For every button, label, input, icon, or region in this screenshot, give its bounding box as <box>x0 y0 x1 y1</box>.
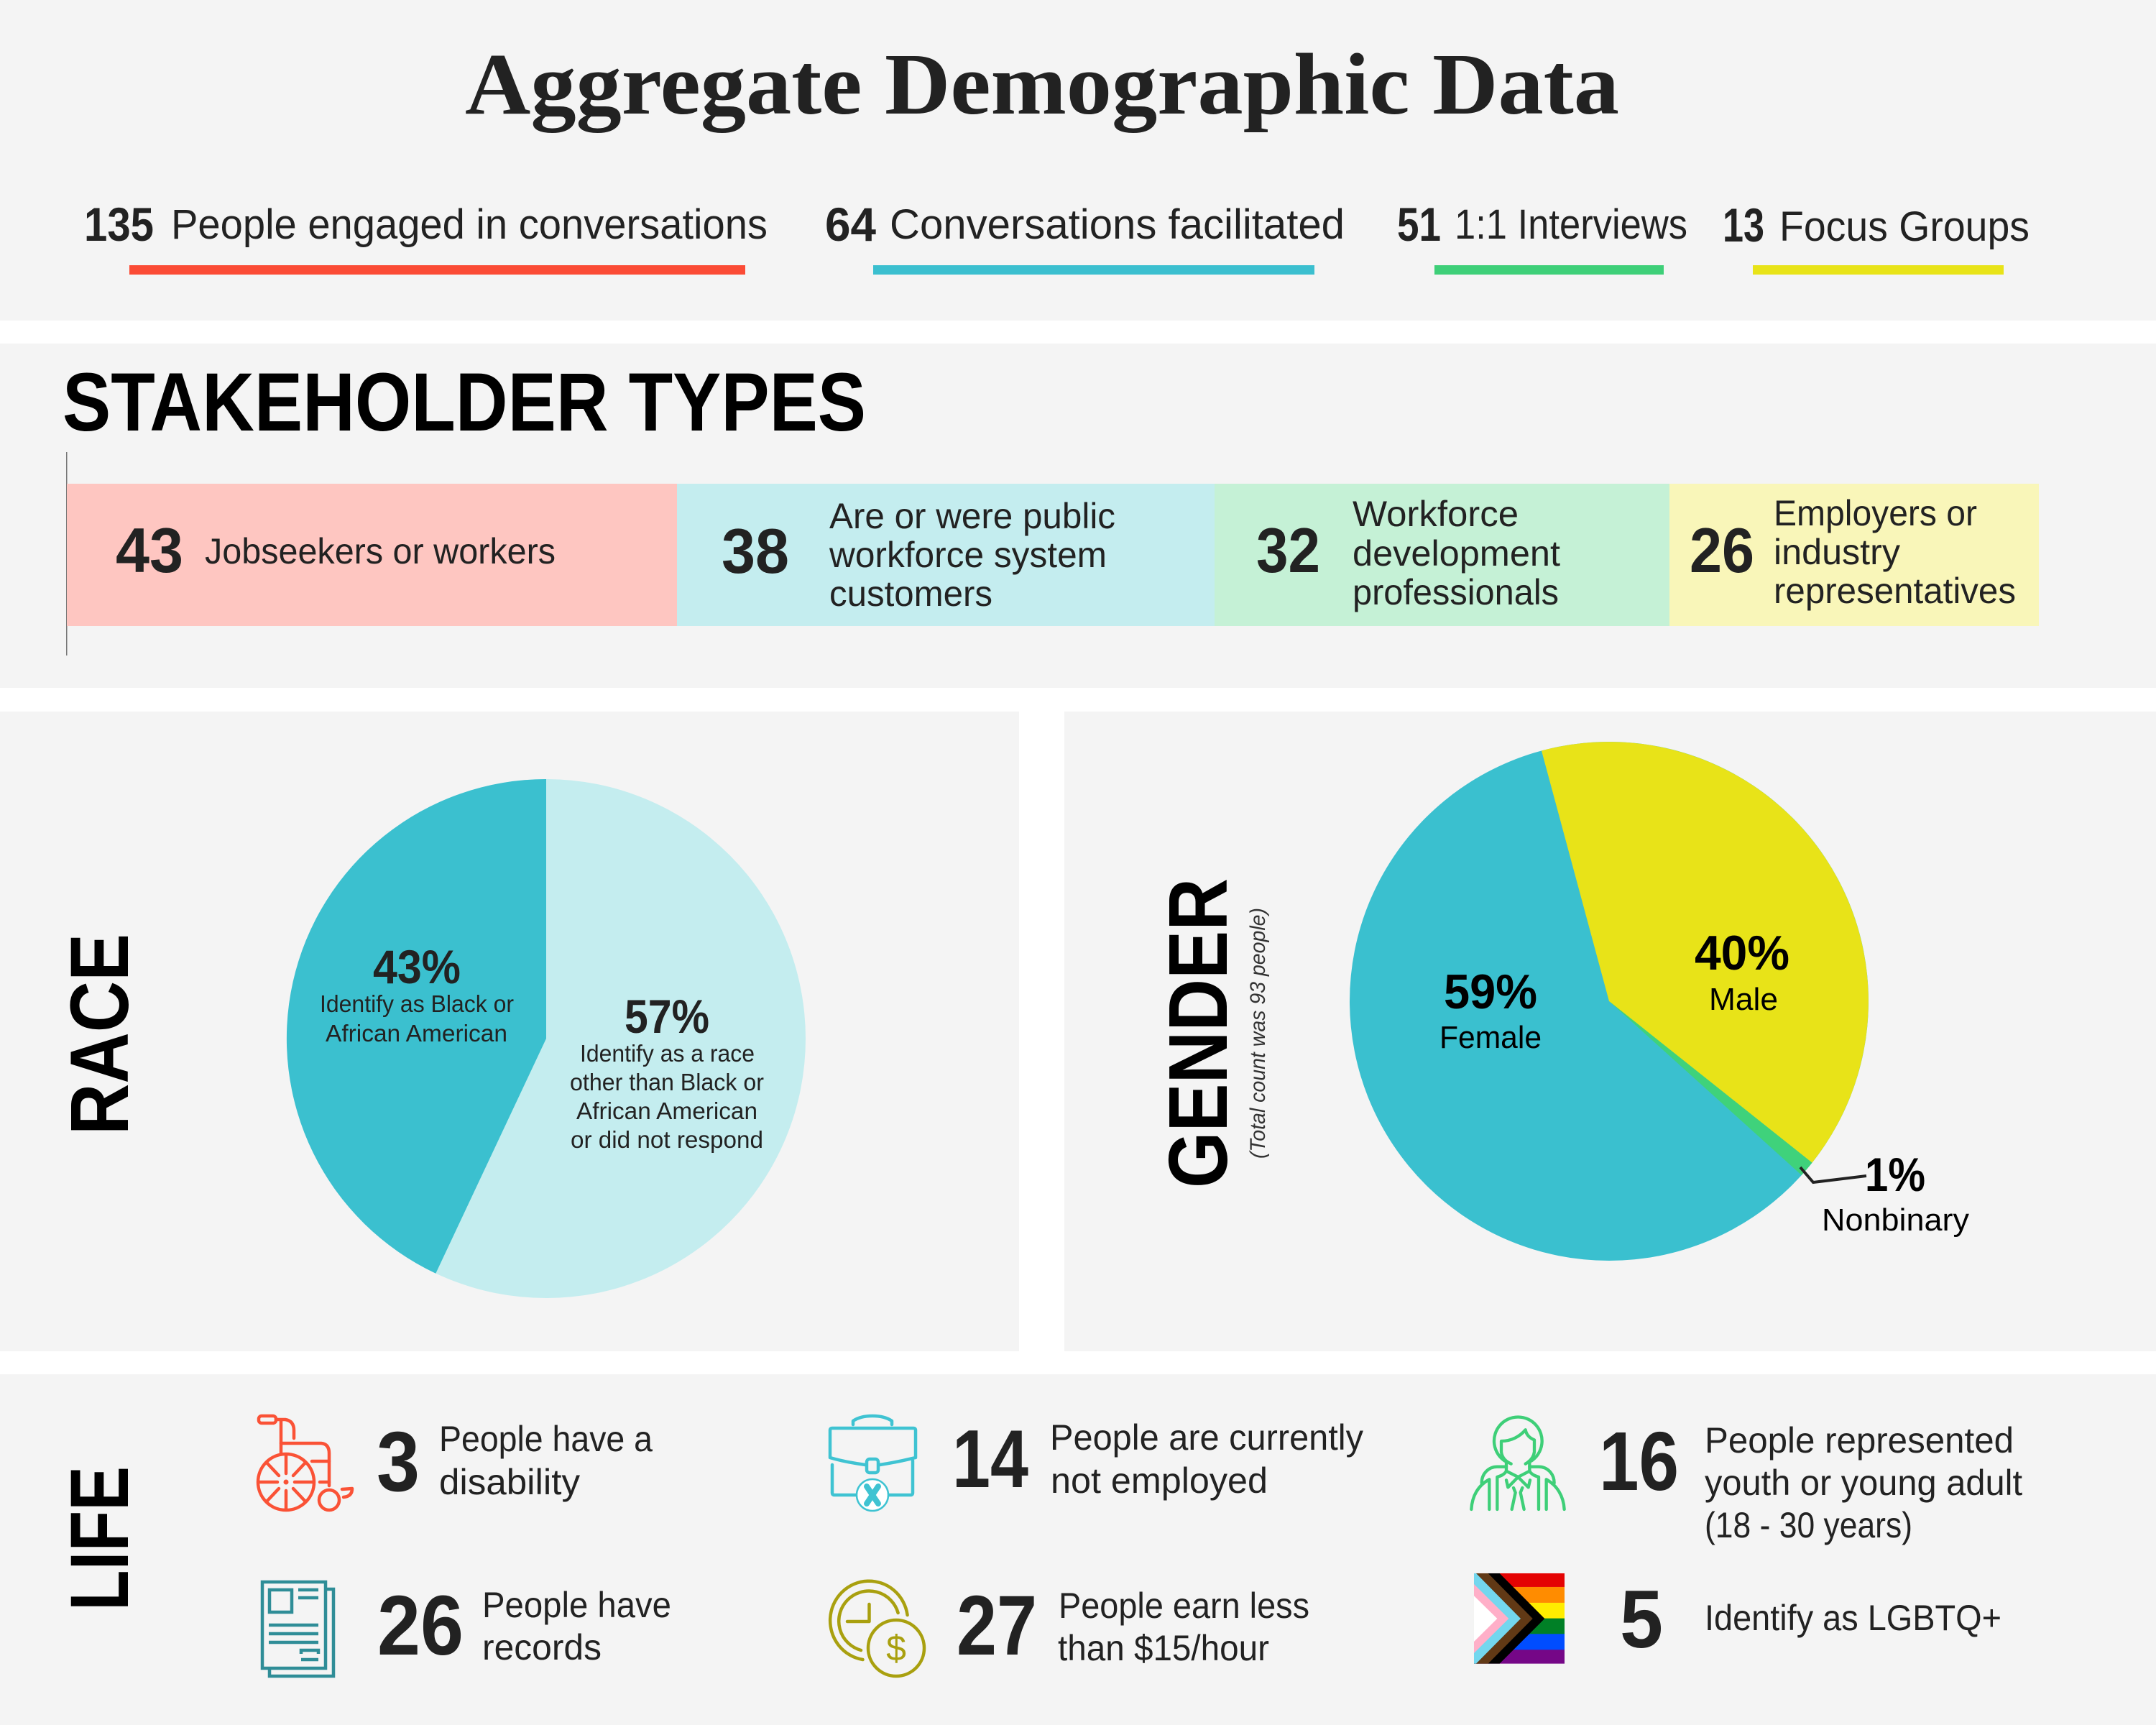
stat: focus groups: Focus Groups <box>1779 203 2030 250</box>
label: disability <box>439 1419 653 1502</box>
bar segment: workforce professionals: development <box>1353 533 1560 574</box>
number: 5: 5 <box>1620 1574 1663 1665</box>
stat: focus groups: 13 <box>1723 198 1764 252</box>
stat: focus groups <box>1723 198 2030 275</box>
icon: clock and coin: $ <box>886 1628 906 1668</box>
leader line: nonbinary <box>1800 1167 1866 1182</box>
bar segment: workforce professionals: Workforce <box>1353 494 1519 534</box>
heading: gender: GENDER <box>1151 878 1245 1188</box>
label: 57 percent: African American <box>576 1098 757 1124</box>
icon: document <box>262 1582 333 1676</box>
number: 16: 16 <box>1599 1414 1679 1508</box>
number: 3: 3 <box>377 1414 420 1509</box>
icon: progress pride flag <box>1474 1573 1565 1664</box>
label: youth <box>1705 1420 2022 1545</box>
label: low wage: People earn less <box>1059 1586 1309 1626</box>
panel: header summary <box>0 0 2156 321</box>
label: low wage: than $15/hour <box>1058 1628 1269 1668</box>
stat: low wage <box>830 1578 1309 1676</box>
stat: people engaged: People engaged in conversations <box>171 201 768 248</box>
icon: clock and coin <box>830 1581 924 1676</box>
label: youth: (18 - 30 years) <box>1705 1505 1912 1545</box>
label: female: Female <box>1439 1020 1542 1055</box>
bar segment: jobseekers <box>67 484 677 626</box>
label: nonbinary <box>1822 1148 1969 1238</box>
label: 57 percent: Identify as a race <box>580 1040 755 1067</box>
stat: people engaged <box>84 198 768 275</box>
label: 43 percent <box>320 940 514 1046</box>
label: male <box>1695 926 1789 1017</box>
bar segment: employers: industry <box>1774 532 1900 572</box>
stat: interviews: 1:1 Interviews <box>1455 201 1687 248</box>
label: youth: youth or young adult <box>1705 1463 2022 1503</box>
stat: youth <box>1471 1414 2022 1545</box>
label: youth: People represented <box>1705 1420 2014 1460</box>
panel: stakeholder types <box>0 344 2156 688</box>
number: 27: 27 <box>957 1578 1037 1673</box>
stat: not employed <box>830 1414 1363 1511</box>
bar segment: public workforce customers: Are or were public <box>829 496 1115 536</box>
title: Aggregate Demographic Data <box>465 36 1619 133</box>
label: low wage <box>1058 1586 1309 1668</box>
pie chart: race <box>287 779 806 1298</box>
label: not employed <box>1050 1417 1363 1501</box>
bar segment: public workforce customers: workforce system <box>829 535 1107 575</box>
stat: conversations facilitated <box>825 198 1345 275</box>
label: records <box>482 1585 671 1668</box>
label: 57 percent <box>570 990 764 1153</box>
bar segment: public workforce customers: 38 <box>722 515 789 586</box>
label: disability: disability <box>439 1462 580 1502</box>
label: 57 percent: or did not respond <box>571 1126 763 1153</box>
bar segment: employers <box>1669 484 2039 626</box>
label: male: 40% <box>1695 926 1789 980</box>
panel: gender <box>1064 712 2156 1351</box>
label: 57 percent: other than Black or <box>570 1069 764 1095</box>
bar segment: workforce professionals: 32 <box>1256 515 1320 586</box>
pie chart: gender <box>1350 742 1869 1261</box>
heading: race: RACE <box>54 934 146 1135</box>
icon: young person <box>1471 1417 1565 1509</box>
number: 26: 26 <box>377 1578 464 1673</box>
bar segment: workforce professionals: professionals <box>1353 572 1559 612</box>
label: female: 59% <box>1444 965 1537 1019</box>
label: nonbinary: Nonbinary <box>1822 1202 1969 1238</box>
label: records: records <box>482 1627 602 1668</box>
icon: wheelchair <box>258 1416 352 1510</box>
label: nonbinary: 1% <box>1865 1148 1925 1201</box>
note: total count: (Total count was 93 people) <box>1246 908 1270 1159</box>
stat: lgbtq <box>1474 1573 2001 1665</box>
label: 57 percent: 57% <box>625 990 709 1043</box>
stat: conversations facilitated: 64 <box>825 198 876 251</box>
stat: disability <box>258 1414 653 1510</box>
number: 14: 14 <box>952 1414 1028 1505</box>
label: 43 percent: African American <box>326 1020 507 1046</box>
panel: race <box>0 712 1019 1351</box>
label: lgbtq: Identify as LGBTQ+ <box>1705 1598 2001 1638</box>
bar segment: public workforce customers <box>677 484 1215 626</box>
bar segment: jobseekers: Jobseekers or workers <box>205 531 556 571</box>
stat: interviews: 51 <box>1397 198 1441 251</box>
label: records: People have <box>482 1585 671 1625</box>
label: female <box>1439 965 1542 1055</box>
stat: records <box>262 1578 671 1676</box>
bar segment: workforce professionals <box>1215 484 1669 626</box>
label: not employed: People are currently <box>1050 1417 1363 1458</box>
label: male: Male <box>1709 982 1778 1017</box>
bar segment: public workforce customers: customers <box>829 574 992 614</box>
label: not employed: not employed <box>1051 1460 1268 1501</box>
panel: life <box>0 1374 2156 1725</box>
stat: interviews <box>1397 198 1687 275</box>
bar segment: employers: 26 <box>1690 515 1754 586</box>
label: disability: People have a <box>439 1419 653 1459</box>
label: 43 percent: Identify as Black or <box>320 990 514 1017</box>
label: 43 percent: 43% <box>373 940 461 993</box>
stat: conversations facilitated: Conversations facilitated <box>890 201 1345 248</box>
bar segment: employers: representatives <box>1774 571 2016 611</box>
bar segment: jobseekers: 43 <box>116 515 183 586</box>
heading: stakeholder types: STAKEHOLDER TYPES <box>63 356 866 448</box>
icon: briefcase <box>830 1416 916 1511</box>
heading: life: LIFE <box>54 1466 146 1611</box>
stat: people engaged: 135 <box>84 198 154 251</box>
bar segment: employers: Employers or <box>1774 493 1977 533</box>
